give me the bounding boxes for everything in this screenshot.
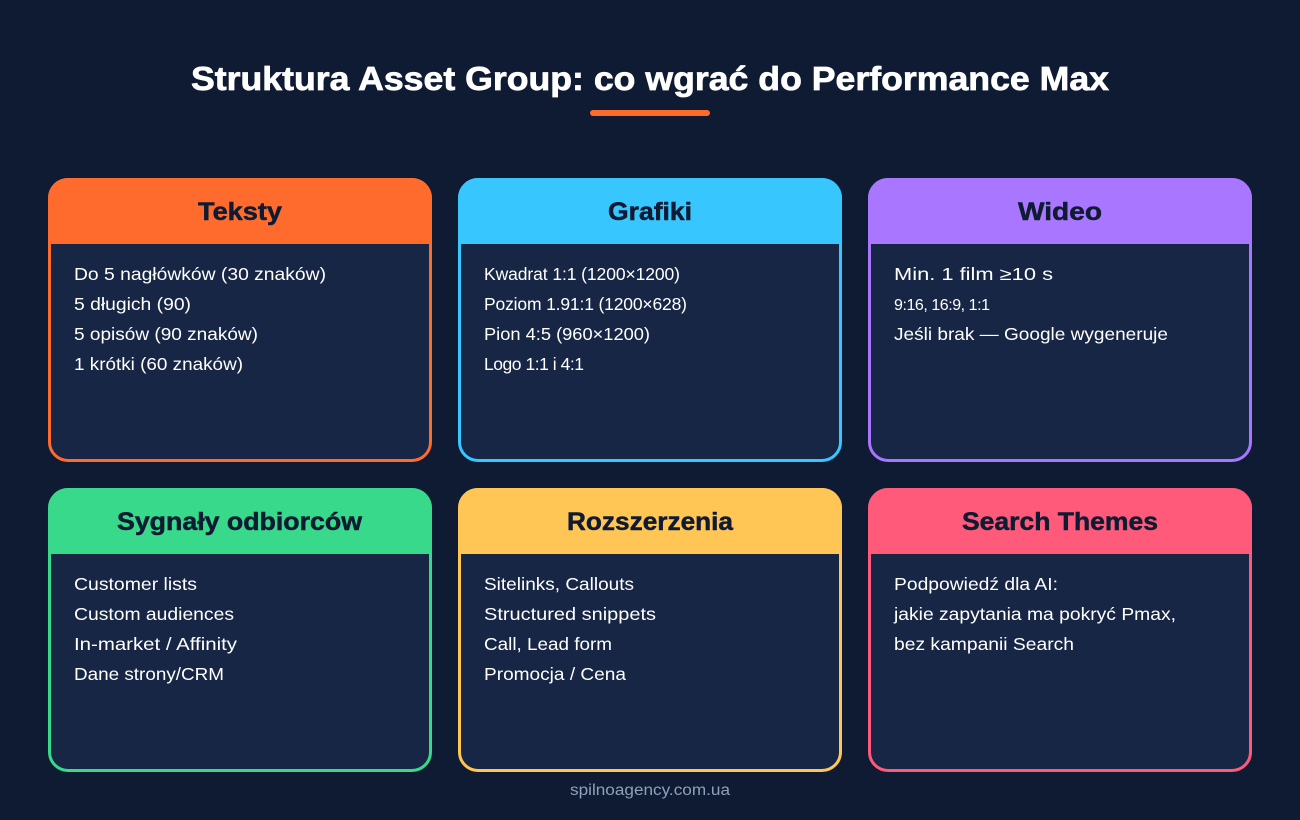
text block: Sygnały odbiorców <box>74 574 237 684</box>
footer source: spilnoagency.com.ua <box>570 782 730 799</box>
panel: Wideo <box>868 178 1252 460</box>
text block: Teksty: 5 długich (90) <box>74 294 191 314</box>
text block: Search Themes: Podpowiedź dla AI: <box>894 574 1058 594</box>
text block: Search Themes <box>893 574 1176 654</box>
text block: Rozszerzenia: Structured snippets <box>484 604 656 624</box>
panel: Grafiki <box>458 178 842 460</box>
panel: Teksty <box>48 178 432 460</box>
text block: Rozszerzenia: Promocja / Cena <box>484 664 626 684</box>
text block: Wideo: Min. 1 film ≥10 s <box>894 264 1053 284</box>
text block: Search Themes: jakie zapytania ma pokryć Pmax, <box>893 604 1176 624</box>
text block: Sygnały odbiorców: Customer lists <box>74 574 197 594</box>
text block: Wideo: Jeśli brak — Google wygeneruje <box>894 324 1168 344</box>
panel: Rozszerzenia <box>458 488 842 770</box>
text block: Sygnały odbiorców: Custom audiences <box>74 604 234 624</box>
text block: Teksty: 1 krótki (60 znaków) <box>74 354 243 374</box>
heading: Rozszerzenia: Rozszerzenia <box>567 508 734 536</box>
text block: Sygnały odbiorców: In-market / Affinity <box>74 634 237 654</box>
text block: Grafiki: Logo 1:1 i 4:1 <box>484 354 584 374</box>
text block: Rozszerzenia <box>484 574 656 684</box>
text block: Teksty <box>74 264 326 374</box>
text block: Teksty: 5 opisów (90 znaków) <box>74 324 258 344</box>
heading: Teksty: Teksty <box>198 198 282 226</box>
heading: Grafiki: Grafiki <box>608 198 692 226</box>
text block: Grafiki <box>484 264 687 374</box>
text block: Rozszerzenia: Sitelinks, Callouts <box>484 574 634 594</box>
panel: Search Themes <box>868 488 1252 770</box>
title: Struktura Asset Group: co wgrać do Performance Max <box>191 60 1110 97</box>
heading: Sygnały odbiorców: Sygnały odbiorców <box>117 508 363 536</box>
title underline <box>590 110 710 116</box>
text block: Search Themes: bez kampanii Search <box>894 634 1074 654</box>
text block: Grafiki: Kwadrat 1:1 (1200×1200) <box>484 264 680 284</box>
panel: Sygnały odbiorców <box>48 488 432 770</box>
text block: Teksty: Do 5 nagłówków (30 znaków) <box>74 264 326 284</box>
text block: Grafiki: Poziom 1.91:1 (1200×628) <box>484 294 687 314</box>
heading: Search Themes: Search Themes <box>962 508 1158 536</box>
text block: Sygnały odbiorców: Dane strony/CRM <box>74 664 224 684</box>
text block: Wideo: 9:16, 16:9, 1:1 <box>894 297 990 314</box>
text block: Grafiki: Pion 4:5 (960×1200) <box>484 324 650 344</box>
text block: Rozszerzenia: Call, Lead form <box>484 634 612 654</box>
text block: Wideo <box>894 264 1168 344</box>
heading: Wideo: Wideo <box>1018 198 1102 226</box>
